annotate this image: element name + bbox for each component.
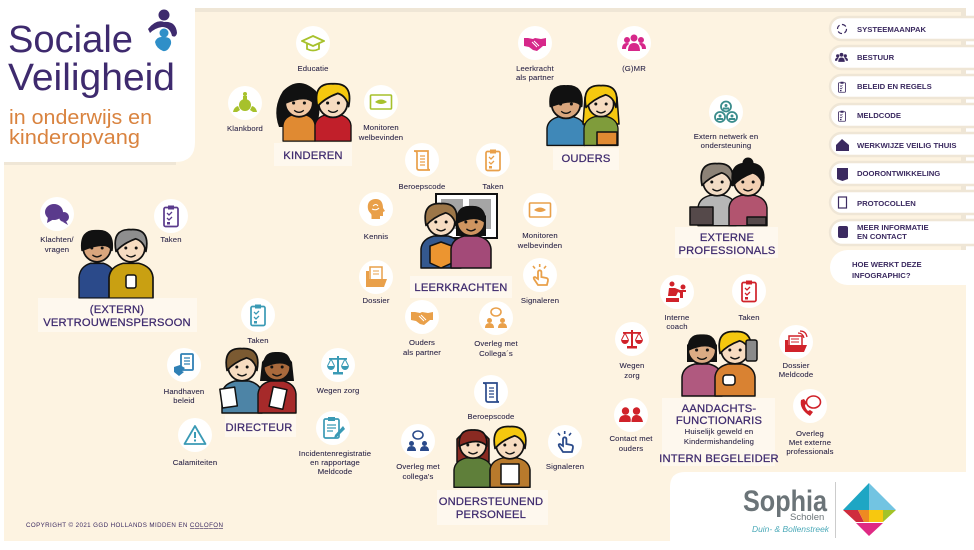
panel: ondersteunend personeel [396, 375, 584, 525]
icon: handhaven beleid: beleid [173, 396, 195, 405]
menu: meer informatie en contact: EN CONTACT [857, 232, 907, 241]
icon: overleg externe professionals: Met externe [789, 438, 831, 447]
panel: extern netwerk [675, 95, 778, 258]
label: directeur [225, 415, 296, 437]
panel: ouders [516, 26, 651, 170]
icon: overleg met collega's [396, 424, 440, 481]
icon: overleg met collega's: Collega´s [479, 349, 513, 358]
icon: monitoren welbevinden: welbevinden [358, 133, 403, 142]
subtitle: kinderopvang [9, 127, 140, 149]
label: externe professionals [675, 227, 778, 258]
panel: leerkrachten [359, 143, 562, 358]
icon: extern netwerk [694, 95, 758, 150]
menu: beleid en regels: BELEID EN REGELS [857, 82, 932, 91]
icon: kennis: Kennis [364, 232, 388, 241]
menu: meer informatie en contact: MEER INFORMATIE [857, 223, 929, 232]
icon: taken: Taken [482, 182, 504, 191]
icon: taken: Taken [247, 336, 269, 345]
label: kinderen: KINDEREN [283, 150, 343, 162]
icon: monitoren welbevinden [517, 193, 562, 250]
icon: overleg externe professionals: professionals [786, 447, 834, 456]
title [8, 19, 175, 99]
illustration: ouders [547, 86, 619, 145]
icon: signaleren: Signaleren [546, 462, 584, 471]
label: ouders: OUDERS [561, 153, 611, 165]
icon: taken [154, 199, 188, 244]
icon: wegen zorg: Wegen [620, 361, 644, 370]
menu: werkwijze veilig thuis: WERKWIJZE VEILIG THUIS [857, 141, 957, 150]
icon: leerkracht als partner [516, 26, 555, 82]
menu: meldcode: MELDCODE [857, 111, 901, 120]
menu: bestuur [830, 46, 974, 69]
menu: werkwijze veilig thuis [830, 133, 974, 156]
menu: meldcode [830, 104, 974, 127]
illustration: leerkrachten with board [421, 194, 497, 268]
icon: handhaven beleid [164, 348, 204, 405]
logo card [670, 472, 974, 550]
subtitle [9, 107, 152, 149]
icon: monitoren welbevinden: welbevinden [517, 241, 562, 250]
logo: Sophia: Duin- & Bollenstreek [752, 524, 830, 534]
label: vertrouwenspersoon [38, 298, 197, 332]
menu: protocollen [830, 191, 974, 214]
icon: dossier [359, 260, 393, 305]
label: ondersteunend personeel: ONDERSTEUNEND [439, 496, 543, 508]
icon: interne coach [660, 275, 694, 331]
logo: Sophia: Sophia [743, 485, 827, 518]
icon: taken [241, 298, 275, 345]
label: directeur: DIRECTEUR [225, 422, 293, 434]
menu: doorontwikkeling [830, 162, 974, 185]
sidebar menu [830, 17, 974, 285]
label: externe professionals: EXTERNE [700, 232, 754, 244]
panel: aandachtsfunctionaris [609, 274, 834, 466]
icon: handhaven beleid: Handhaven [164, 387, 204, 396]
illustration: aandachtsfunctionarissen [682, 332, 757, 396]
icon: (G)MR: (G)MR [622, 64, 646, 73]
label: aandachtsfunctionaris: AANDACHTS- [682, 403, 756, 415]
icon: taken: Taken [160, 235, 182, 244]
menu: protocollen: PROTOCOLLEN [857, 199, 916, 208]
icon: monitoren welbevinden [358, 85, 403, 142]
icon: wegen zorg [317, 348, 359, 395]
menu: bestuur: BESTUUR [857, 53, 895, 62]
menu: beleid en regels [830, 75, 974, 98]
title: Veiligheid [8, 57, 175, 99]
icon: incidentenregistratie [299, 411, 371, 476]
label: kinderen [274, 143, 352, 166]
icon: wegen zorg [615, 322, 649, 380]
icon: monitoren welbevinden: Monitoren [363, 123, 399, 132]
icon: overleg externe professionals [786, 389, 834, 456]
subtitle: in onderwijs en [9, 107, 152, 129]
logo: Sophia [743, 482, 836, 538]
icon: calamiteiten [173, 418, 217, 467]
icon: dossier meldcode: Dossier [782, 361, 810, 370]
icon: calamiteiten: Calamiteiten [173, 458, 217, 467]
illustration: directeuren [220, 349, 296, 413]
icon: ouders als partner [403, 300, 441, 357]
label: externe professionals: PROFESSIONALS [678, 245, 776, 257]
icon: incidentenregistratie: en rapportage [310, 458, 360, 467]
icon: (G)MR [617, 26, 651, 73]
icon: overleg met collega's: Overleg met [474, 339, 518, 348]
label: aandachtsfunctionaris: INTERN BEGELEIDER [659, 453, 779, 465]
icon: incidentenregistratie: Meldcode [318, 467, 352, 476]
menu: hoe werkt deze infographic: INFOGRAPHIC? [852, 271, 911, 280]
label: ondersteunend personeel: PERSONEEL [456, 509, 526, 521]
icon: klachten/vragen [40, 197, 74, 254]
icon: taken: Taken [738, 313, 760, 322]
label: aandachtsfunctionaris [659, 398, 779, 466]
icon: ouders als partner: als partner [403, 348, 441, 357]
label: aandachtsfunctionaris: FUNCTIONARIS [676, 415, 762, 427]
icon: dossier meldcode [779, 325, 813, 379]
icon: beroepscode: Beroepscode [468, 412, 514, 421]
icon: beroepscode [468, 375, 514, 421]
icon: beroepscode [399, 143, 445, 191]
icon: taken [732, 274, 766, 322]
title: Sociale [8, 19, 133, 61]
icon: extern netwerk: Extern netwerk en [694, 132, 758, 141]
label: ouders [553, 148, 619, 170]
label: leerkrachten [410, 276, 512, 298]
icon: leerkracht als partner: Leerkracht [516, 64, 555, 73]
icon: educatie [296, 26, 330, 73]
logo: Sophia: Scholen [790, 512, 824, 523]
icon: leerkracht als partner: als partner [516, 73, 554, 82]
icon: klachten/vragen: vragen [45, 245, 69, 254]
icon: overleg met collega's: Overleg met [396, 462, 440, 471]
icon: kennis [359, 192, 393, 241]
icon: beroepscode: Beroepscode [399, 182, 445, 191]
menu: meer informatie en contact [830, 220, 974, 245]
icon: overleg met collega's: collega's [402, 472, 434, 481]
illustration: ondersteunend personeel [454, 427, 530, 487]
label: ondersteunend personeel [437, 490, 548, 525]
menu: systeemaanpak [830, 17, 974, 40]
panel: vertrouwenspersoon [38, 197, 197, 332]
label: leerkrachten: LEERKRACHTEN [414, 282, 508, 294]
panel: kinderen [227, 26, 403, 166]
icon: monitoren welbevinden: Monitoren [522, 231, 558, 240]
icon: wegen zorg: zorg [624, 371, 640, 380]
icon: wegen zorg: Wegen zorg [317, 386, 359, 395]
icon: taken [476, 143, 510, 191]
icon: overleg externe professionals: Overleg [796, 429, 824, 438]
illustration: externe professionals [690, 158, 767, 226]
icon: contact met ouders [609, 398, 653, 453]
label: aandachtsfunctionaris: Kindermishandeling [684, 437, 754, 446]
icon: signaleren [521, 258, 559, 305]
icon: logo people [148, 10, 177, 51]
icon: overleg met collega's [474, 301, 518, 358]
icon: contact met ouders: Contact met [609, 434, 653, 443]
menu: hoe werkt deze infographic: HOE WERKT DEZE [852, 260, 922, 269]
icon: interne coach: Interne [665, 313, 689, 322]
illustration: kinderen [276, 83, 351, 141]
logo: diamond [843, 483, 896, 536]
icon: dossier: Dossier [362, 296, 390, 305]
label: vertrouwenspersoon: VERTROUWENSPERSOON [43, 317, 191, 329]
icon: signaleren: Signaleren [521, 296, 559, 305]
menu: hoe werkt deze infographic [830, 250, 974, 285]
icon: klankbord: Klankbord [227, 124, 263, 133]
icon: dossier meldcode: Meldcode [779, 370, 813, 379]
icon: ouders als partner: Ouders [409, 338, 435, 347]
icon: extern netwerk: ondersteuning [701, 141, 751, 150]
menu: systeemaanpak: SYSTEEMAANPAK [857, 25, 926, 34]
icon: klachten/vragen: Klachten/ [40, 235, 74, 244]
menu: doorontwikkeling: DOORONTWIKKELING [857, 169, 940, 178]
icon: signaleren [546, 425, 584, 471]
title card [0, 0, 195, 162]
illustration: vertrouwenspersonen [79, 230, 153, 298]
icon: contact met ouders: ouders [619, 444, 643, 453]
copyright: COPYRIGHT © 2021 GGD HOLLANDS MIDDEN EN COLOFON [26, 522, 223, 529]
label: vertrouwenspersoon: (EXTERN) [90, 304, 144, 316]
panel: directeur [164, 298, 371, 476]
icon: incidentenregistratie: Incidentenregistratie [299, 449, 371, 458]
icon: interne coach: coach [666, 322, 688, 331]
icon: klankbord [227, 86, 263, 133]
icon: educatie: Educatie [297, 64, 329, 73]
label: aandachtsfunctionaris: Huiselijk geweld en [685, 427, 753, 436]
